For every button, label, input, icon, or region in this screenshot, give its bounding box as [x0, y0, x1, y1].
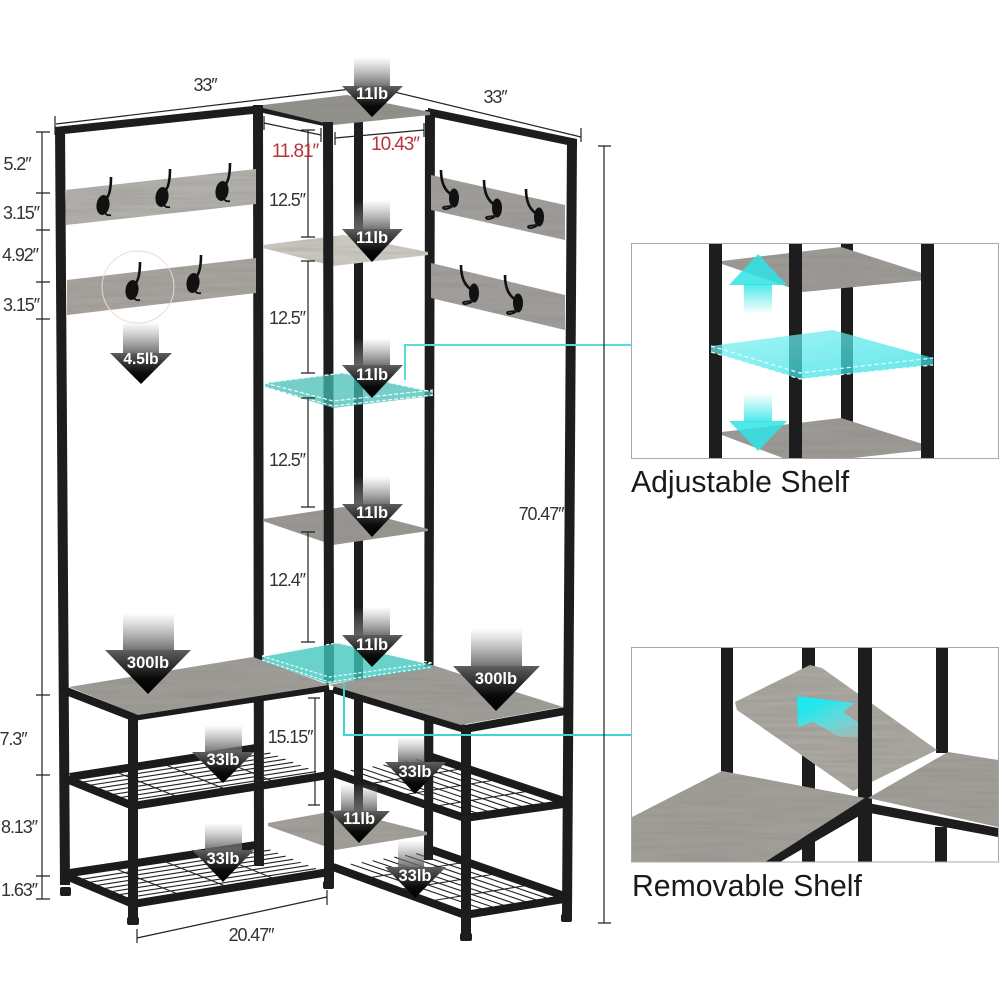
heading: removable shelf: Removable Shelf [632, 870, 862, 903]
load arrow: wire shelf 33lb lower left [192, 823, 254, 882]
load arrow: removable shelf 11lb [342, 607, 403, 667]
dimension: top width left: 33″ [193, 75, 218, 95]
dimension: front width [137, 890, 327, 945]
adjustable panel upper shelf [722, 247, 925, 292]
hook panels: left [65, 169, 256, 315]
dimension: lower tower spacing [268, 698, 320, 805]
load arrow: right bench 300lb [453, 628, 540, 711]
removable panel bench right [868, 752, 998, 837]
dimensions: shelf spacing: 12.5″ [269, 190, 307, 210]
load arrow: removable shelf 11lb: 11lb [356, 636, 388, 654]
load arrow: second shelf 11lb: 11lb [356, 229, 388, 247]
dimensions: left height stack: 5.2″ [4, 154, 32, 174]
load arrow: hook 4.5lb [110, 322, 172, 384]
load arrow: wire shelf 33lb lower right: 33lb [398, 867, 432, 885]
dimensions: left height stack: 4.92″ [2, 245, 40, 265]
tower front post [323, 122, 334, 882]
hooks: left [95, 163, 230, 301]
removable shelf tilted [735, 665, 937, 791]
load arrow: left bench 300lb: 300lb [127, 654, 169, 672]
dimensions: left height stack: 8.13″ [1, 817, 39, 837]
load arrow: fourth shelf 11lb: 11lb [356, 504, 388, 522]
left bench top [69, 657, 329, 715]
load arrow: lower shelf 11lb: 11lb [343, 810, 375, 828]
adjustable panel posts [709, 243, 934, 458]
heading: adjustable shelf: Adjustable Shelf [631, 466, 850, 499]
load arrow: wire shelf 33lb upper right: 33lb [398, 763, 432, 781]
wire shelves [64, 748, 564, 912]
dimensions: left height stack: 3.15″ [3, 203, 41, 223]
dimensions: shelf spacing [269, 130, 315, 642]
removable panel bench left [632, 771, 866, 862]
bench frame and front posts [61, 687, 571, 941]
dimensions: left height stack: 7.3″ [0, 729, 28, 749]
arrow: shelf slides out [797, 696, 880, 738]
load arrow: top shelf 11lb [342, 57, 403, 117]
tower shelf: top [263, 95, 430, 125]
tower shelf: fourth [263, 507, 428, 545]
dimensions: shelf spacing: 12.5″ [269, 450, 307, 470]
right bench top [329, 665, 563, 725]
load arrow: hook 4.5lb: 4.5lb [123, 351, 159, 368]
frame: outer posts and top beams [55, 105, 577, 922]
low tier beams [64, 748, 570, 915]
dimension: total height [519, 146, 611, 923]
load arrow: wire shelf 33lb upper left: 33lb [206, 751, 240, 769]
arrow: shelf moves up [729, 254, 787, 314]
load arrow: right bench 300lb: 300lb [475, 670, 517, 688]
dimension: top width left [55, 75, 368, 135]
dimensions: left height stack: 3.15″ [3, 295, 41, 315]
dimension: lower tower spacing: 15.15″ [268, 727, 314, 747]
callout line: adjustable shelf [405, 345, 632, 380]
hooks: right [441, 170, 544, 314]
highlighted adjustable shelf [711, 330, 933, 379]
highlight circle around hook [102, 251, 174, 323]
removable shelf highlight [262, 643, 432, 684]
dimension: top width right: 33″ [483, 87, 508, 107]
frame: back posts [253, 105, 435, 866]
dimensions: tower depth in red [264, 116, 424, 162]
arrow: shelf moves down [729, 393, 787, 451]
dimensions: left height stack [0, 132, 50, 900]
load arrow: second shelf 11lb [342, 200, 403, 262]
load arrow: wire shelf 33lb upper right [385, 737, 446, 794]
load arrow: left bench 300lb [105, 613, 191, 694]
load arrow: wire shelf 33lb lower left: 33lb [206, 850, 240, 868]
panel: removable shelf [631, 647, 999, 862]
dimensions: shelf spacing: 12.5″ [269, 308, 307, 328]
callout line: removable shelf [344, 683, 632, 735]
tower shelf: lower [268, 810, 427, 850]
load arrow: adjustable shelf 11lb: 11lb [356, 366, 388, 384]
dimensions: tower depth in red: 10.43″ [371, 134, 420, 155]
load arrow: fourth shelf 11lb [342, 476, 403, 537]
dimension: front width: 20.47″ [229, 925, 275, 945]
load arrow: adjustable shelf 11lb [342, 338, 403, 398]
panel: adjustable shelf [631, 243, 999, 458]
dimension: total height: 70.47″ [519, 504, 565, 524]
dimensions: shelf spacing: 12.4″ [269, 570, 307, 590]
dimension: top width right [378, 87, 581, 142]
load arrow: lower shelf 11lb [329, 783, 390, 843]
load arrow: top shelf 11lb: 11lb [356, 85, 388, 103]
hook panels: right [431, 175, 565, 330]
dimensions: tower depth in red: 11.81″ [272, 141, 320, 162]
load arrow: wire shelf 33lb lower right [385, 840, 446, 898]
dimensions: left height stack: 1.63″ [1, 880, 39, 900]
load arrow: wire shelf 33lb upper left [192, 725, 254, 783]
tower shelf: second [263, 235, 428, 266]
adjustable shelf highlight [265, 373, 433, 408]
removable panel posts [721, 647, 948, 862]
adjustable panel lower shelf [722, 418, 926, 458]
